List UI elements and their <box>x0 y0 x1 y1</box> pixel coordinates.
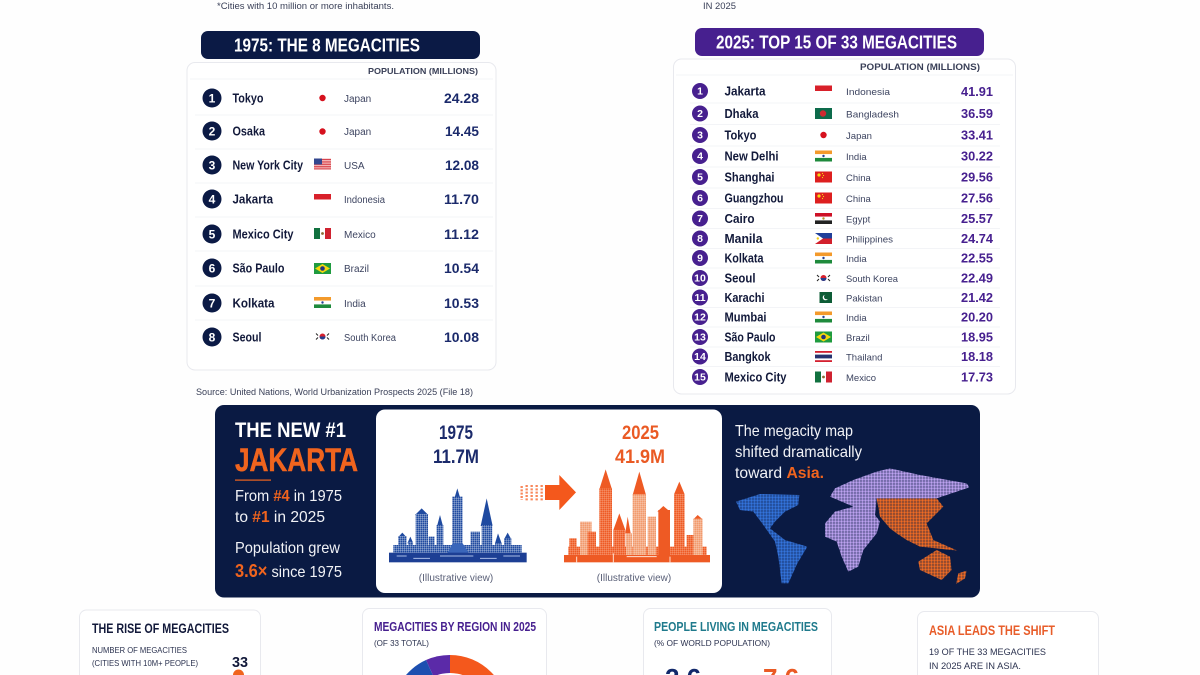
row: Jakarta 1975: Jakarta <box>232 192 274 206</box>
text block: map statement: shifted dramatically <box>735 444 862 461</box>
panel: people living in megacities <box>644 608 832 675</box>
row: Seoul 1975: Seoul <box>232 330 262 344</box>
row: Dhaka 2025: 2 <box>697 108 703 120</box>
panel: people living in megacities: PEOPLE LIVING IN MEGACITIES <box>654 619 818 634</box>
heading: 2025 table: 2025: TOP 15 OF 33 MEGACITIES <box>716 32 957 52</box>
row: Cairo 2025 <box>692 210 993 226</box>
row: Tokyo 1975: 24.28 <box>444 90 479 106</box>
chart: dotted world map <box>736 468 969 584</box>
panel: megacities by region <box>362 608 546 675</box>
row: Kolkata 2025: 22.55 <box>961 250 993 266</box>
text block: Jakarta summary: 3.6× since 1975 <box>235 561 342 581</box>
row: Karachi 2025: 21.42 <box>961 290 993 305</box>
row: Sao Paulo 1975: Brazil <box>344 264 369 275</box>
footnote: megacity definition: *Cities with 10 million or more inhabitants. <box>217 1 394 11</box>
panel: skyline comparison: 2025 <box>622 423 659 444</box>
row: Shanghai 2025: 5 <box>697 172 703 184</box>
text block: Jakarta summary <box>235 418 358 581</box>
panel: rise of megacities: (CITIES WITH 10M+ PEOPLE) <box>92 658 198 668</box>
row: Osaka 1975 <box>202 122 479 140</box>
row: Shanghai 2025 <box>692 169 993 185</box>
row: New York City 1975: USA <box>344 161 365 172</box>
arrow: dotted orange arrow <box>522 475 576 510</box>
row: Karachi 2025: Pakistan <box>846 294 882 304</box>
text block: map statement: The megacity map <box>735 423 853 440</box>
row: Karachi 2025: Karachi <box>724 290 764 305</box>
row: Manila 2025: Manila <box>724 231 763 246</box>
panel: 2025 table: POPULATION (MILLIONS) <box>860 62 980 72</box>
row: Shanghai 2025: 29.56 <box>961 170 993 184</box>
row: New York City 1975: New York City <box>232 158 304 172</box>
row: Seoul 2025: South Korea <box>846 274 899 285</box>
row: Tokyo 2025: Japan <box>846 131 872 142</box>
text block: map statement <box>735 423 862 482</box>
icon: blue 1975 skyline <box>389 488 527 562</box>
row: Mumbai 2025: Mumbai <box>724 310 766 324</box>
panel: skyline comparison: 11.7M <box>433 447 479 468</box>
row: Kolkata 2025: 9 <box>697 252 703 264</box>
row: Cairo 2025: Egypt <box>846 214 871 226</box>
row: Mumbai 2025: 20.20 <box>961 310 993 324</box>
row: Sao Paulo 1975: 10.54 <box>444 260 479 276</box>
row: Jakarta 1975: 4 <box>209 192 216 206</box>
row: Mexico City 1975: Mexico City <box>232 226 294 242</box>
panel: people living in megacities: (% OF WORLD POPULATION) <box>654 638 770 648</box>
row: Seoul 1975: 10.08 <box>444 329 479 345</box>
row: Jakarta 1975: Indonesia <box>344 195 385 206</box>
row: Mexico City 1975 <box>202 224 479 244</box>
chart: region donut <box>406 655 494 675</box>
text block: Jakarta summary: Population grew <box>235 540 340 557</box>
row: Kolkata 1975: India <box>344 299 366 310</box>
panel: rise of megacities: 33 <box>232 654 248 671</box>
row: Kolkata 1975: 7 <box>209 296 216 310</box>
row: Osaka 1975: Japan <box>344 127 371 138</box>
row: Tokyo 2025: Tokyo <box>724 128 757 142</box>
row: Manila 2025: 8 <box>697 233 703 245</box>
row: Cairo 2025: 7 <box>697 213 703 225</box>
row: Seoul 1975 <box>202 328 479 346</box>
row: Mexico City 2025: Mexico City <box>724 370 787 384</box>
row: Jakarta 1975: 11.70 <box>444 191 479 207</box>
caption: 1975 skyline: (Illustrative view) <box>419 573 493 584</box>
row: Jakarta 2025: Indonesia <box>846 87 891 98</box>
row: Karachi 2025 <box>692 290 993 306</box>
row: Jakarta 2025: 41.91 <box>961 84 993 99</box>
row: Kolkata 1975: 10.53 <box>444 295 479 311</box>
row: Manila 2025 <box>692 230 994 246</box>
note fragment: in 2025: IN 2025 <box>703 1 736 11</box>
panel: megacities by region: (OF 33 TOTAL) <box>374 638 429 648</box>
row: Bangkok 2025: Thailand <box>846 352 882 364</box>
row: Bangkok 2025: Bangkok <box>724 349 771 364</box>
row: Tokyo 1975: Tokyo <box>232 90 264 106</box>
row: Bangkok 2025 <box>692 348 993 364</box>
row: Mexico City 2025: 17.73 <box>961 370 993 384</box>
row: New Delhi 2025: 30.22 <box>961 148 993 164</box>
panel: 2025 table <box>674 59 1016 394</box>
panel: the new number one banner <box>215 405 980 598</box>
panel: rise of megacities: NUMBER OF MEGACITIES <box>92 645 187 655</box>
row: New Delhi 2025 <box>692 148 993 164</box>
row: Mexico City 2025: 15 <box>694 372 706 384</box>
row: Mexico City 1975: 11.12 <box>444 226 479 242</box>
row: Seoul 2025 <box>692 270 993 286</box>
row: New York City 1975: 12.08 <box>445 157 479 173</box>
text block: Jakarta summary: to #1 in 2025 <box>235 509 325 526</box>
row: Bangkok 2025: 18.18 <box>961 349 993 364</box>
row: Mexico City 2025 <box>692 369 993 385</box>
row: Seoul 2025: 10 <box>694 272 706 284</box>
row: Sao Paulo 2025: São Paulo <box>724 330 776 344</box>
panel: skyline comparison: 1975 <box>439 423 473 444</box>
row: Kolkata 2025 <box>692 250 993 266</box>
row: Osaka 1975: 2 <box>209 124 216 138</box>
row: Mumbai 2025: India <box>846 313 867 324</box>
row: Shanghai 2025: Shanghai <box>724 170 774 184</box>
row: Manila 2025: 24.74 <box>961 231 994 246</box>
row: Tokyo 1975 <box>202 88 479 108</box>
row: Guangzhou 2025: China <box>846 194 872 205</box>
caption: 2025 skyline: (Illustrative view) <box>597 573 671 584</box>
icon: orange 2025 skyline <box>564 469 710 562</box>
row: Sao Paulo 2025: 13 <box>694 332 706 344</box>
row: Sao Paulo 2025 <box>692 329 993 345</box>
panel: megacities by region: MEGACITIES BY REGION IN 2025 <box>374 619 536 634</box>
row: Jakarta 2025 <box>692 83 993 99</box>
panel: Asia leads the shift <box>918 612 1098 675</box>
row: Tokyo 2025 <box>692 127 993 143</box>
row: Mexico City 1975: Mexico <box>344 230 376 241</box>
panel: rise of megacities <box>80 610 260 675</box>
text block: Jakarta summary: From #4 in 1975 <box>235 488 342 505</box>
text block: map statement: toward Asia. <box>735 465 824 482</box>
heading: 1975 table <box>201 31 480 59</box>
heading: 2025 table <box>695 28 984 56</box>
heading: 1975 table: 1975: THE 8 MEGACITIES <box>234 34 420 56</box>
row: Tokyo 1975: 1 <box>209 92 216 106</box>
panel: rise of megacities: THE RISE OF MEGACITIES <box>92 621 229 636</box>
panel: skyline comparison: 41.9M <box>615 447 665 468</box>
row: Sao Paulo 2025: 18.95 <box>961 330 993 344</box>
row: New York City 1975: 3 <box>209 158 216 172</box>
row: Dhaka 2025: Dhaka <box>724 106 759 121</box>
row: Mumbai 2025: 12 <box>694 312 706 324</box>
row: Sao Paulo 1975 <box>202 258 479 278</box>
panel: 1975 table: POPULATION (MILLIONS) <box>368 66 478 76</box>
row: Mexico City 2025: Mexico <box>846 373 876 384</box>
row: Jakarta 2025: 1 <box>697 86 703 98</box>
row: Seoul 2025: 22.49 <box>961 270 993 286</box>
row: Manila 2025: Philippines <box>846 234 893 246</box>
row: Seoul 1975: South Korea <box>344 333 396 344</box>
row: Tokyo 2025: 33.41 <box>961 128 993 142</box>
text block: Jakarta summary: JAKARTA <box>235 442 358 478</box>
row: Seoul 1975: 8 <box>209 330 216 344</box>
row: New Delhi 2025: India <box>846 152 867 163</box>
row: Seoul 2025: Seoul <box>724 270 756 286</box>
row: Tokyo 2025: 3 <box>697 130 703 142</box>
row: Jakarta 1975 <box>202 190 479 208</box>
panel: skyline comparison <box>376 410 722 593</box>
row: New Delhi 2025: 4 <box>697 150 703 162</box>
row: Kolkata 2025: Kolkata <box>724 250 764 266</box>
row: Sao Paulo 1975: 6 <box>209 262 216 276</box>
row: Guangzhou 2025: 6 <box>697 192 703 204</box>
row: Osaka 1975: 14.45 <box>445 123 479 139</box>
row: Guangzhou 2025: 27.56 <box>961 190 993 206</box>
row: Guangzhou 2025: Guangzhou <box>724 190 784 206</box>
row: Bangkok 2025: 14 <box>694 351 706 363</box>
row: Osaka 1975: Osaka <box>232 124 266 138</box>
panel: Asia leads the shift: 19 OF THE 33 MEGACITIES <box>929 647 1046 658</box>
row: Cairo 2025: Cairo <box>724 211 755 226</box>
row: Karachi 2025: 11 <box>694 292 706 304</box>
row: New Delhi 2025: New Delhi <box>724 148 778 164</box>
panel: Asia leads the shift: ASIA LEADS THE SHIFT <box>929 623 1056 638</box>
row: New York City 1975 <box>202 156 479 174</box>
row: Kolkata 1975 <box>202 294 479 312</box>
panel: 1975 table <box>187 62 496 370</box>
row: Dhaka 2025 <box>692 106 993 122</box>
row: Mumbai 2025 <box>692 309 993 325</box>
row: Sao Paulo 2025: Brazil <box>846 333 870 344</box>
row: Kolkata 1975: Kolkata <box>232 296 275 310</box>
row: Cairo 2025: 25.57 <box>961 211 993 226</box>
row: Sao Paulo 1975: São Paulo <box>232 260 285 276</box>
row: Dhaka 2025: Bangladesh <box>846 110 899 120</box>
row: Mexico City 1975: 5 <box>209 228 216 242</box>
text block: Jakarta summary: THE NEW #1 <box>235 418 346 442</box>
row: Tokyo 1975: Japan <box>344 94 371 105</box>
row: Jakarta 2025: Jakarta <box>724 84 766 98</box>
row: Dhaka 2025: 36.59 <box>961 106 993 121</box>
source line: Source: United Nations, World Urbanization Prospects 2025 (File 18) <box>196 387 473 397</box>
row: Shanghai 2025: China <box>846 173 872 184</box>
row: Guangzhou 2025 <box>692 190 993 206</box>
panel: Asia leads the shift: IN 2025 ARE IN ASIA. <box>929 661 1021 672</box>
row: Kolkata 2025: India <box>846 254 867 265</box>
